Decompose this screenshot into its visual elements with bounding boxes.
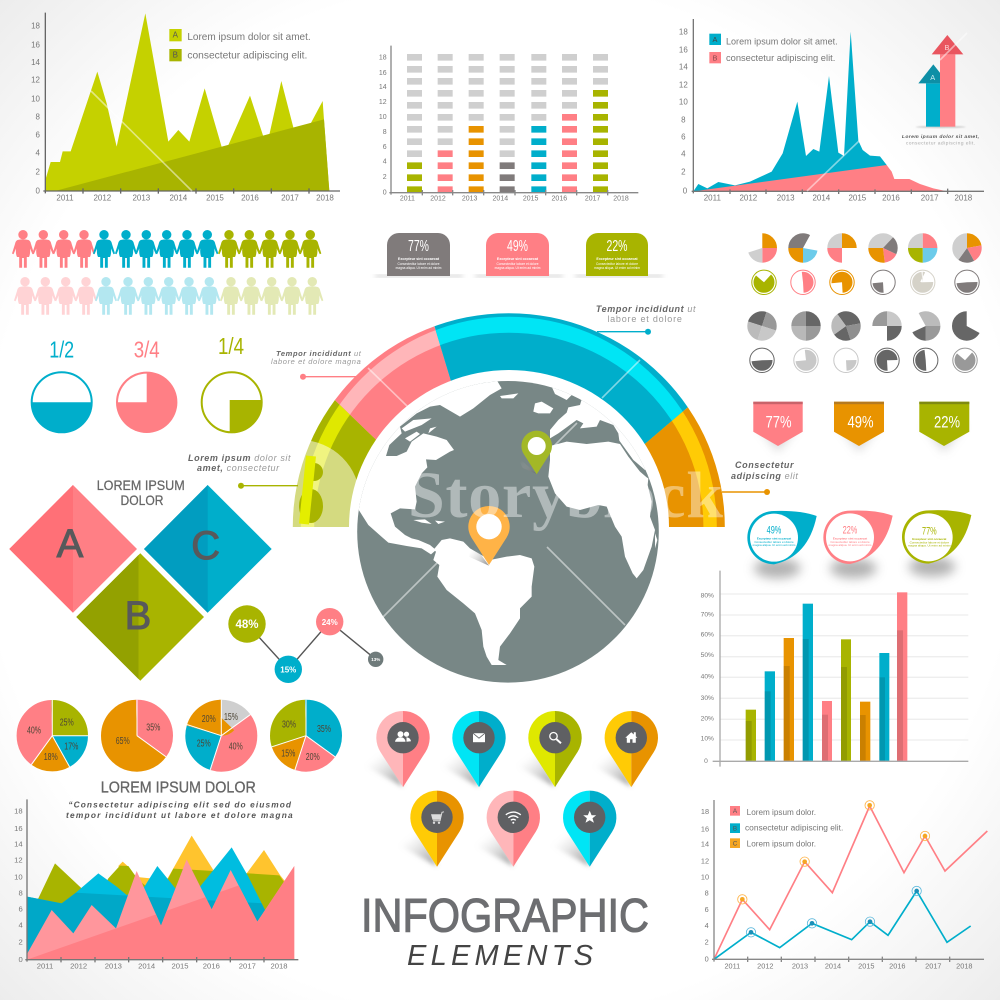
y axis labels: 14 <box>701 840 709 849</box>
y axis labels: 14 <box>14 840 23 849</box>
card: 22%: magna aliqua. Ut enim ad minim <box>594 266 640 270</box>
teal line <box>714 891 971 959</box>
arrow chart <box>916 35 966 128</box>
small pie grid: row 4 <box>750 348 977 372</box>
arrow chart: B <box>945 43 950 52</box>
quote: tempor incididunt ut labore et dolore magna <box>66 810 293 820</box>
x axis labels: 2011 <box>37 961 53 970</box>
arc inner cut-out <box>349 370 669 527</box>
legend: consectetur adipiscing elit. <box>187 51 307 62</box>
pink area <box>27 859 294 960</box>
axes <box>692 19 984 194</box>
map pins: icons <box>361 711 658 867</box>
callout: tempor incididunt top right <box>596 304 696 335</box>
pin: search <box>513 711 582 787</box>
title: INFOGRAPHIC <box>361 890 649 943</box>
pie three: 40% <box>229 742 243 752</box>
area chart: olive top-left <box>31 13 340 202</box>
y axis labels: 8 <box>36 112 41 121</box>
bubble 15% <box>275 656 302 683</box>
orange area <box>118 836 287 903</box>
x axis labels: 2015 <box>523 196 539 203</box>
orange markers <box>738 801 930 904</box>
callout: tempor incididunt top right: Tempor incididunt ut <box>596 304 696 314</box>
card: 49%: Excepteur sint occaecat <box>497 257 539 261</box>
fraction three quarters: 3/4 <box>134 337 160 363</box>
x axis labels: 2017 <box>585 196 601 203</box>
diamonds <box>9 477 272 681</box>
pin: wifi <box>471 791 540 867</box>
map pin: olive <box>517 431 552 474</box>
grey bar segments <box>407 57 608 154</box>
x axis labels: 2011 <box>724 962 740 971</box>
bar chart: percent <box>701 571 968 767</box>
y axis labels: 16 <box>14 824 23 833</box>
bubble 48%: 48% <box>235 619 259 631</box>
x axis labels: 2013 <box>792 962 808 971</box>
x axis labels: 2012 <box>757 962 773 971</box>
fraction one quarter <box>202 333 262 433</box>
x axis labels: 2013 <box>105 961 122 970</box>
arc segment: teal <box>434 313 688 444</box>
axes <box>25 799 298 962</box>
x axis labels: 2014 <box>169 193 188 202</box>
y axis labels: 10 <box>379 114 387 121</box>
y axis labels: 16 <box>679 46 688 55</box>
pin: people <box>361 711 430 787</box>
x axis labels: 2017 <box>921 194 939 203</box>
x axis labels <box>704 194 973 203</box>
pin: star <box>548 791 616 867</box>
callout: tempor incididunt left: labore et dolore magna <box>271 357 361 366</box>
y axis labels <box>701 592 714 765</box>
series B area <box>55 119 329 191</box>
globe sphere <box>357 381 659 683</box>
title: ELEMENTS <box>407 940 594 972</box>
y axis labels: 2 <box>36 167 41 176</box>
diamond B: B <box>125 594 151 638</box>
y axis labels: 12 <box>14 856 23 865</box>
x axis labels: 2016 <box>203 961 220 970</box>
callout: lorem ipsum left <box>188 453 298 489</box>
legend: C <box>733 840 738 847</box>
ribbon 22% <box>919 402 969 446</box>
teardrop 22%: 22% <box>843 525 858 537</box>
teardrop 77%: 77% <box>922 525 937 537</box>
teardrop 22%: magna aliqua. Ut enim ad minim <box>829 543 872 547</box>
title: LOREM IPSUM <box>97 477 185 493</box>
olive area <box>27 863 294 960</box>
teardrop shadows <box>754 557 955 578</box>
y axis labels: 4 <box>383 158 387 165</box>
y axis labels: 4 <box>19 921 24 930</box>
callout: tempor incididunt left <box>271 349 362 380</box>
fraction three quarters <box>116 337 177 433</box>
y axis labels <box>379 54 387 197</box>
diamond C: C <box>191 524 220 568</box>
card: 49%: magna aliqua. Ut enim ad minim <box>495 266 541 270</box>
y axis labels: 4 <box>36 148 41 157</box>
pie one <box>27 700 88 767</box>
x axis labels: 2016 <box>241 193 259 202</box>
bars <box>746 592 907 761</box>
heading: lorem ipsum dolor: LOREM IPSUM DOLOR <box>101 780 256 797</box>
arrow chart caption: Lorem ipsum dolor sit amet, <box>902 134 979 140</box>
arrow chart: A <box>930 73 935 82</box>
y axis labels: 70% <box>701 612 714 619</box>
series A area <box>693 32 893 191</box>
legend: B <box>713 53 718 62</box>
legend: B <box>173 51 178 60</box>
y axis labels: 50% <box>701 652 714 659</box>
diamond C <box>144 485 272 613</box>
legend: A <box>713 35 718 44</box>
x axis labels: 2016 <box>882 194 900 203</box>
card: 77%: 77% <box>408 238 429 255</box>
pin: home <box>589 711 658 787</box>
y axis labels: 14 <box>31 58 41 67</box>
y axis labels: 0 <box>383 190 387 197</box>
globe <box>357 381 659 683</box>
y axis labels: 2 <box>383 174 387 181</box>
y axis labels: 0 <box>36 186 41 195</box>
pie four: 20% <box>306 752 320 763</box>
axes <box>713 571 968 767</box>
y axis labels: 6 <box>383 144 387 151</box>
axes <box>43 13 340 194</box>
watermark: Storyblock <box>408 459 723 532</box>
x axis labels: 2012 <box>430 196 446 203</box>
pie one: 17% <box>64 742 78 752</box>
arc segment: orange <box>644 407 725 527</box>
segmented bar chart: top-centre <box>379 46 638 203</box>
y axis labels: 60% <box>701 632 714 639</box>
y axis labels: 12 <box>701 856 709 865</box>
dark grey segments <box>500 166 515 190</box>
diamond A <box>9 485 137 613</box>
y axis labels: 6 <box>681 133 686 142</box>
y axis labels: 0 <box>683 187 688 196</box>
y axis labels: 12 <box>679 81 688 90</box>
y axis labels: 4 <box>705 921 709 930</box>
x axis labels <box>37 961 288 970</box>
y axis labels: 10% <box>701 735 714 742</box>
arc segment: pink <box>335 326 451 440</box>
x axis labels: 2018 <box>270 961 288 970</box>
title <box>97 477 185 508</box>
ribbon shadows <box>758 425 964 452</box>
teal markers <box>746 886 921 937</box>
legend: Lorem ipsum dolor sit amet. <box>187 32 311 43</box>
axes <box>389 46 638 195</box>
pie two <box>116 700 166 757</box>
line chart: bottom-right <box>701 800 987 971</box>
pin: cart <box>395 791 464 867</box>
legend: consectetur adipiscing elit. <box>726 53 835 63</box>
callout: consectetur right <box>722 460 799 495</box>
x axis labels: 2013 <box>132 193 151 202</box>
legend: A <box>733 808 738 815</box>
card: 49%: 49% <box>507 238 528 255</box>
legend: A <box>173 31 179 40</box>
card: 22%: 22% <box>606 238 628 255</box>
teardrop 77%: magna aliqua. Ut enim ad minim <box>908 544 951 548</box>
y axis labels: 30% <box>701 695 714 702</box>
x axis labels <box>400 196 629 203</box>
pie one: 40% <box>27 726 41 736</box>
ribbon badges <box>753 402 969 452</box>
pink line <box>714 806 987 959</box>
y axis labels: 18 <box>701 807 709 816</box>
orange segments <box>469 129 484 190</box>
bubble 13%: 13% <box>371 657 380 662</box>
pin: mail <box>437 711 506 787</box>
arc segment: olive <box>292 400 376 527</box>
callout: consectetur right: Consectetur <box>735 460 794 470</box>
ribbon 22%: 22% <box>934 412 960 432</box>
y axis labels: 10 <box>679 98 688 107</box>
y axis labels: 16 <box>31 41 41 50</box>
y axis labels: 2 <box>681 168 686 177</box>
y axis labels: 2 <box>705 938 709 947</box>
quote <box>66 799 293 820</box>
y axis labels: 18 <box>379 54 387 61</box>
x axis labels <box>724 962 972 971</box>
x axis labels: 2014 <box>493 196 508 203</box>
bubble 24%: 24% <box>322 618 338 627</box>
pie four: 30% <box>282 720 296 730</box>
y axis labels: 0 <box>704 758 708 765</box>
y axis labels: 0 <box>19 955 23 964</box>
y axis labels: 40% <box>701 673 714 680</box>
x axis labels: 2018 <box>954 194 973 203</box>
x axis labels: 2014 <box>812 194 831 203</box>
fraction one half <box>31 337 92 433</box>
ribbon 49% <box>834 402 884 446</box>
x axis labels: 2015 <box>858 962 874 971</box>
y axis labels: 6 <box>19 904 23 913</box>
axes <box>712 800 984 962</box>
pie four: 35% <box>317 724 331 735</box>
legend <box>730 806 843 849</box>
diamond B <box>76 553 204 681</box>
teardrop 49%: magna aliqua. Ut enim ad minim <box>753 543 796 547</box>
x axis labels: 2011 <box>704 194 721 203</box>
pie three: 15% <box>224 712 238 723</box>
teardrop 77%: Consectedtur labore et dolore <box>910 541 949 545</box>
card: 49% <box>486 233 549 276</box>
y axis labels: 4 <box>681 150 686 159</box>
teardrop 22%: Consectedtur labore et dolore <box>830 540 870 544</box>
y axis labels <box>679 27 688 196</box>
small pie grid: row 1 <box>755 241 974 255</box>
callout: tempor incididunt left: Tempor incididunt ut <box>276 349 362 358</box>
x axis labels: 2014 <box>825 962 841 971</box>
y axis labels: 18 <box>679 27 688 36</box>
x axis labels: 2017 <box>925 962 941 971</box>
x axis labels: 2011 <box>400 196 415 203</box>
y axis labels: 16 <box>701 824 709 833</box>
teardrop 49%: 49% <box>767 524 782 536</box>
bubble 13% <box>368 652 383 667</box>
grid lines <box>720 594 968 740</box>
area chart: teal and pink top-right <box>679 19 984 203</box>
series A area <box>45 13 329 191</box>
legend <box>709 34 838 63</box>
pie four <box>272 700 335 770</box>
stat cards: top-centre <box>375 233 663 277</box>
pie three: 20% <box>202 714 216 725</box>
legend: consectetur adipiscing elit. <box>745 824 843 833</box>
small pie grid: row 2 <box>752 270 979 294</box>
title: DOLOR <box>120 492 164 508</box>
pink segments <box>438 117 577 190</box>
series B area <box>693 165 947 191</box>
pie three <box>187 700 250 770</box>
legend: B <box>733 825 737 832</box>
card: 77%: Consectedtur labore et dolore <box>398 262 440 266</box>
ribbon 77%: 77% <box>766 412 792 432</box>
y axis labels <box>701 807 709 964</box>
teal segments <box>531 129 546 190</box>
x axis labels: 2012 <box>93 193 112 202</box>
fraction gauges <box>31 333 262 433</box>
area chart: bottom-left <box>14 799 298 970</box>
title <box>361 890 649 972</box>
legend: Lorem ipsum dolor. <box>747 808 816 817</box>
diamond A: A <box>57 522 84 566</box>
callout: tempor incididunt top right: labore et dolore <box>607 314 683 324</box>
y axis labels: 10 <box>701 873 709 882</box>
arrow chart caption <box>902 134 979 146</box>
y axis labels <box>14 806 24 964</box>
x axis labels <box>56 193 334 202</box>
y axis labels: 6 <box>705 905 709 914</box>
x axis labels: 2012 <box>739 194 758 203</box>
y axis labels <box>31 22 41 195</box>
teardrop 77%: Excepteur sint occaecat <box>912 537 946 541</box>
x axis labels: 2015 <box>848 194 867 203</box>
fraction one quarter: 1/4 <box>218 333 244 359</box>
y axis labels: 0 <box>705 955 709 964</box>
x axis labels: 2015 <box>206 193 224 202</box>
teal area <box>27 847 294 960</box>
x axis labels: 2012 <box>70 961 87 970</box>
x axis labels: 2015 <box>171 961 189 970</box>
y axis labels: 8 <box>19 888 23 897</box>
y axis labels: 80% <box>701 592 714 599</box>
y axis labels: 14 <box>679 63 688 72</box>
card: 22% <box>586 233 648 276</box>
pie one: 25% <box>60 718 74 728</box>
bubble line chart <box>228 605 383 683</box>
y axis labels: 12 <box>379 99 387 106</box>
small pie grid: row 3 <box>755 319 974 333</box>
x axis labels: 2011 <box>56 193 74 202</box>
x axis labels: 2017 <box>239 961 256 970</box>
card: 77%: Excepteur sint occaecat <box>398 257 440 261</box>
pie four: 15% <box>281 748 295 760</box>
y axis labels: 16 <box>379 70 387 77</box>
pie one: 18% <box>44 752 58 763</box>
x axis labels: 2016 <box>889 962 905 971</box>
pie three: 25% <box>197 738 211 750</box>
card: 77% <box>387 233 450 276</box>
bubble 15%: 15% <box>280 666 296 674</box>
y axis labels: 6 <box>36 131 41 140</box>
teardrop 22% <box>823 511 893 564</box>
teardrop 49% <box>747 511 817 564</box>
y axis labels: 18 <box>31 22 41 31</box>
pie two: 35% <box>146 722 160 734</box>
teardrop 22%: Excepteur sint occaecat <box>833 536 867 540</box>
y axis labels: 2 <box>19 938 23 947</box>
x axis labels: 2018 <box>316 193 334 202</box>
x axis labels: 2014 <box>138 961 156 970</box>
card: 22%: Consectedtur labore et dolore <box>596 262 638 266</box>
arrow chart caption: consectetur adipiscing elit. <box>906 140 975 146</box>
x axis labels: 2017 <box>281 193 299 202</box>
ribbon 49%: 49% <box>848 412 874 432</box>
teardrop 49%: Consectedtur labore et dolore <box>754 540 794 544</box>
people row: full colour <box>12 230 321 268</box>
legend <box>169 29 311 62</box>
teardrop 77% <box>902 510 971 564</box>
x axis labels: 2018 <box>613 196 629 203</box>
pie two: 65% <box>116 736 130 747</box>
x axis labels: 2013 <box>777 194 795 203</box>
teardrop stats <box>747 510 971 578</box>
y axis labels: 8 <box>705 889 709 898</box>
card: 49%: Consectedtur labore et dolore <box>496 262 539 266</box>
y axis labels: 20% <box>701 715 714 722</box>
callout: consectetur right: adipiscing elit <box>731 471 799 481</box>
teardrop 49%: Excepteur sint occaecat <box>757 536 791 540</box>
card shadows <box>375 275 663 277</box>
bubble 48% <box>228 605 266 643</box>
legend: Lorem ipsum dolor sit amet. <box>726 36 838 46</box>
x axis labels: 2018 <box>956 962 972 971</box>
y axis labels: 8 <box>681 116 686 125</box>
y axis labels: 12 <box>31 76 41 85</box>
continents <box>358 382 658 665</box>
olive segments <box>407 93 608 190</box>
semicircular arc gauge <box>292 313 725 527</box>
y axis labels: 18 <box>14 806 23 815</box>
legend: Lorem ipsum dolor. <box>747 840 816 849</box>
bubble 24% <box>316 608 343 635</box>
y axis labels: 10 <box>31 94 41 103</box>
map pin: orange <box>468 506 510 566</box>
x axis labels: 2013 <box>462 196 478 203</box>
fraction one half: 1/2 <box>49 337 74 363</box>
callout: lorem ipsum left: Lorem ipsum dolor sit <box>188 453 291 463</box>
card: 77%: magna aliqua. Ut enim ad minim <box>396 266 442 270</box>
ribbon 77% <box>753 402 803 446</box>
y axis labels: 8 <box>383 129 387 136</box>
x axis labels: 2016 <box>552 196 567 203</box>
quote: “Consectetur adipiscing elit sed do eiusmod <box>68 799 292 809</box>
card: 22%: Excepteur sint occaecat <box>596 257 638 261</box>
y axis labels: 14 <box>379 84 387 91</box>
people row: pale <box>14 277 323 315</box>
callout: lorem ipsum left: amet, consectetur <box>197 463 280 473</box>
labelled pies <box>27 700 335 770</box>
y axis labels: 10 <box>14 872 23 881</box>
